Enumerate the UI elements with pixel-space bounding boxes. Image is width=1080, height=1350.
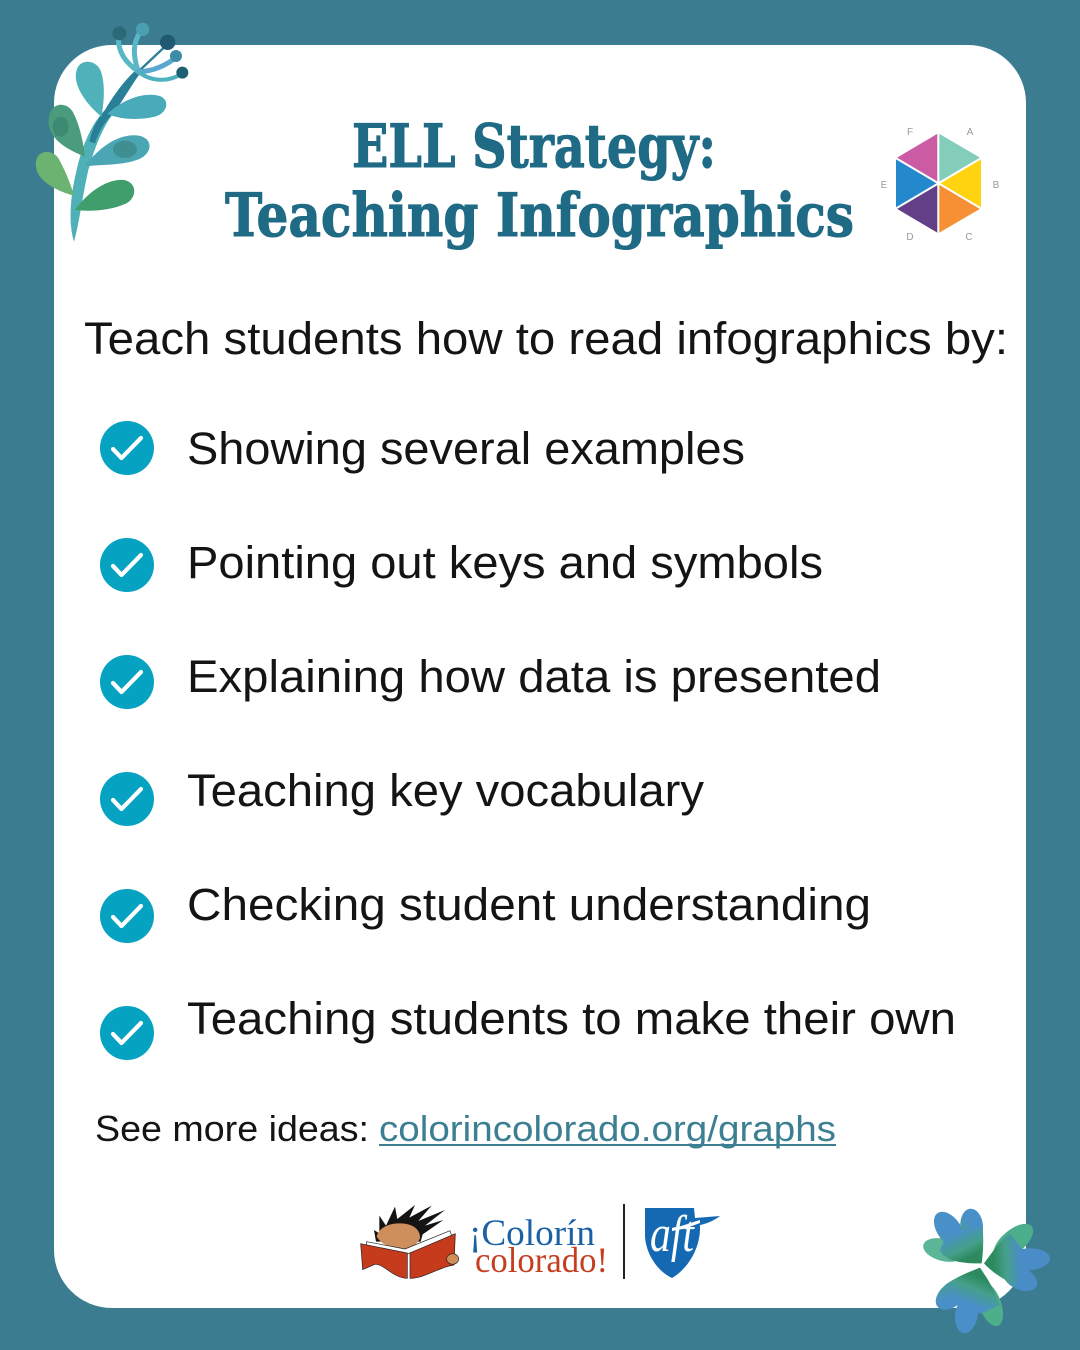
icon: six-colour hexagon: F — [907, 127, 913, 138]
see more link: See more ideas: — [95, 1108, 369, 1149]
item 5 — [100, 879, 871, 943]
item 6: Teaching students to make their own — [187, 993, 956, 1044]
logo: Colorin Colorado — [361, 1205, 608, 1280]
icon: watercolor flower — [921, 1206, 1051, 1335]
see more link: colorincolorado.org/graphs — [379, 1108, 836, 1149]
item 4 — [100, 765, 704, 826]
icon: six-colour hexagon: B — [993, 180, 1000, 191]
icon: six-colour hexagon: E — [881, 180, 888, 191]
item 2: Pointing out keys and symbols — [187, 537, 823, 588]
logo: AFT shield — [645, 1206, 720, 1278]
logo: Colorin Colorado: ¡Colorín — [469, 1213, 595, 1254]
intro text: Teach students how to read infographics by: — [84, 313, 1008, 364]
checklist — [100, 421, 956, 1060]
icon: six-colour hexagon: A — [967, 127, 974, 138]
see more link — [95, 1108, 836, 1149]
icon: child reading book — [361, 1205, 459, 1278]
title: ELL Strategy: — [352, 112, 716, 182]
icon: six-colour hexagon — [881, 127, 1000, 243]
logo: AFT shield: aft — [650, 1206, 695, 1263]
icon: six-colour hexagon: D — [906, 232, 914, 243]
item 3: Explaining how data is presented — [187, 651, 881, 702]
logo: Colorin Colorado: colorado! — [475, 1240, 608, 1280]
icon: six-colour hexagon: C — [965, 232, 973, 243]
item 5: Checking student understanding — [187, 879, 871, 930]
item 6 — [100, 993, 956, 1060]
title: Teaching Infographics — [225, 181, 854, 251]
icon: watercolor plant sprig — [36, 23, 188, 242]
title — [225, 112, 854, 251]
divider — [623, 1204, 625, 1279]
item 1: Showing several examples — [187, 423, 745, 474]
item 4: Teaching key vocabulary — [187, 765, 704, 816]
